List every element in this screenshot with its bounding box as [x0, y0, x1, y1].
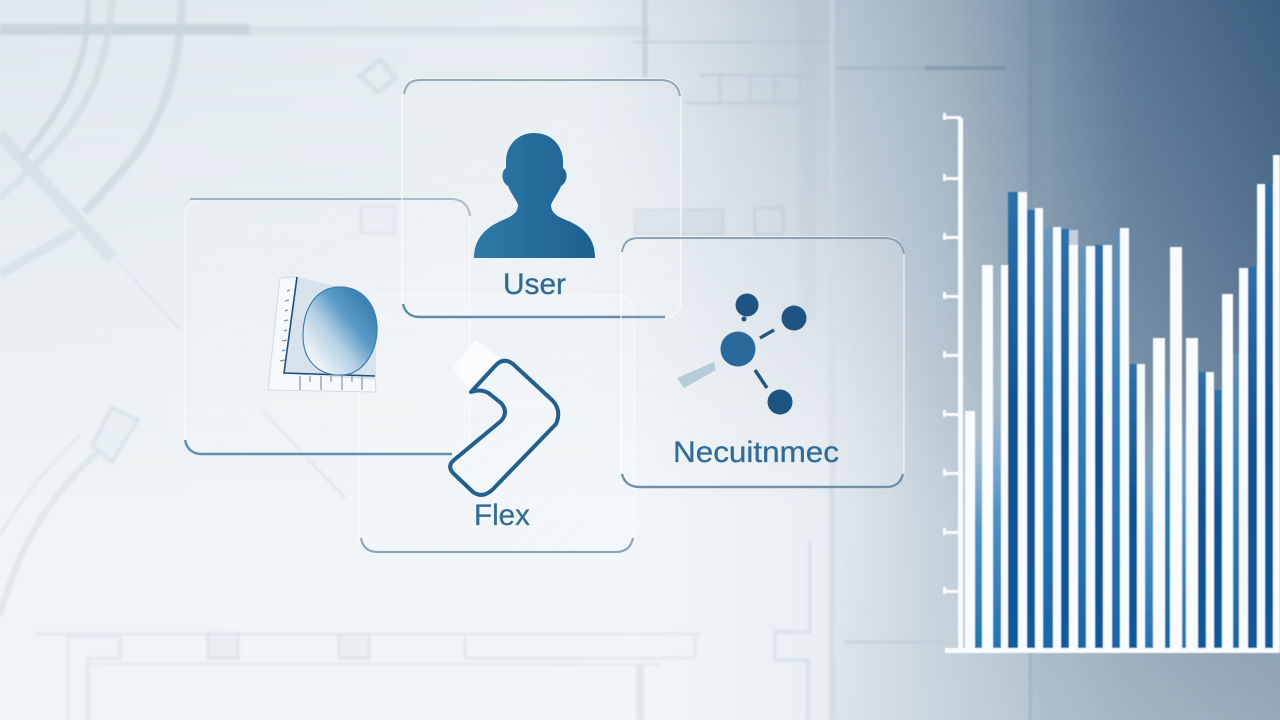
white bars [965, 155, 1280, 649]
label: Flex: Flex [474, 499, 530, 532]
chart axes and ticks [943, 113, 1280, 653]
panel: blueprint card [185, 199, 470, 454]
icon: flex arrow [450, 340, 558, 495]
panel: network card [621, 237, 904, 488]
blue bars [973, 184, 1273, 649]
icon: user silhouette [474, 133, 595, 258]
panel: user card [402, 79, 681, 318]
icon: network nodes [677, 294, 806, 414]
label: User: User [503, 268, 566, 301]
icon: blueprint with lens [268, 277, 377, 392]
label: Necuitnmec: Necuitnmec [673, 436, 839, 469]
bar chart [943, 113, 1280, 653]
panel: flex card [359, 295, 635, 553]
